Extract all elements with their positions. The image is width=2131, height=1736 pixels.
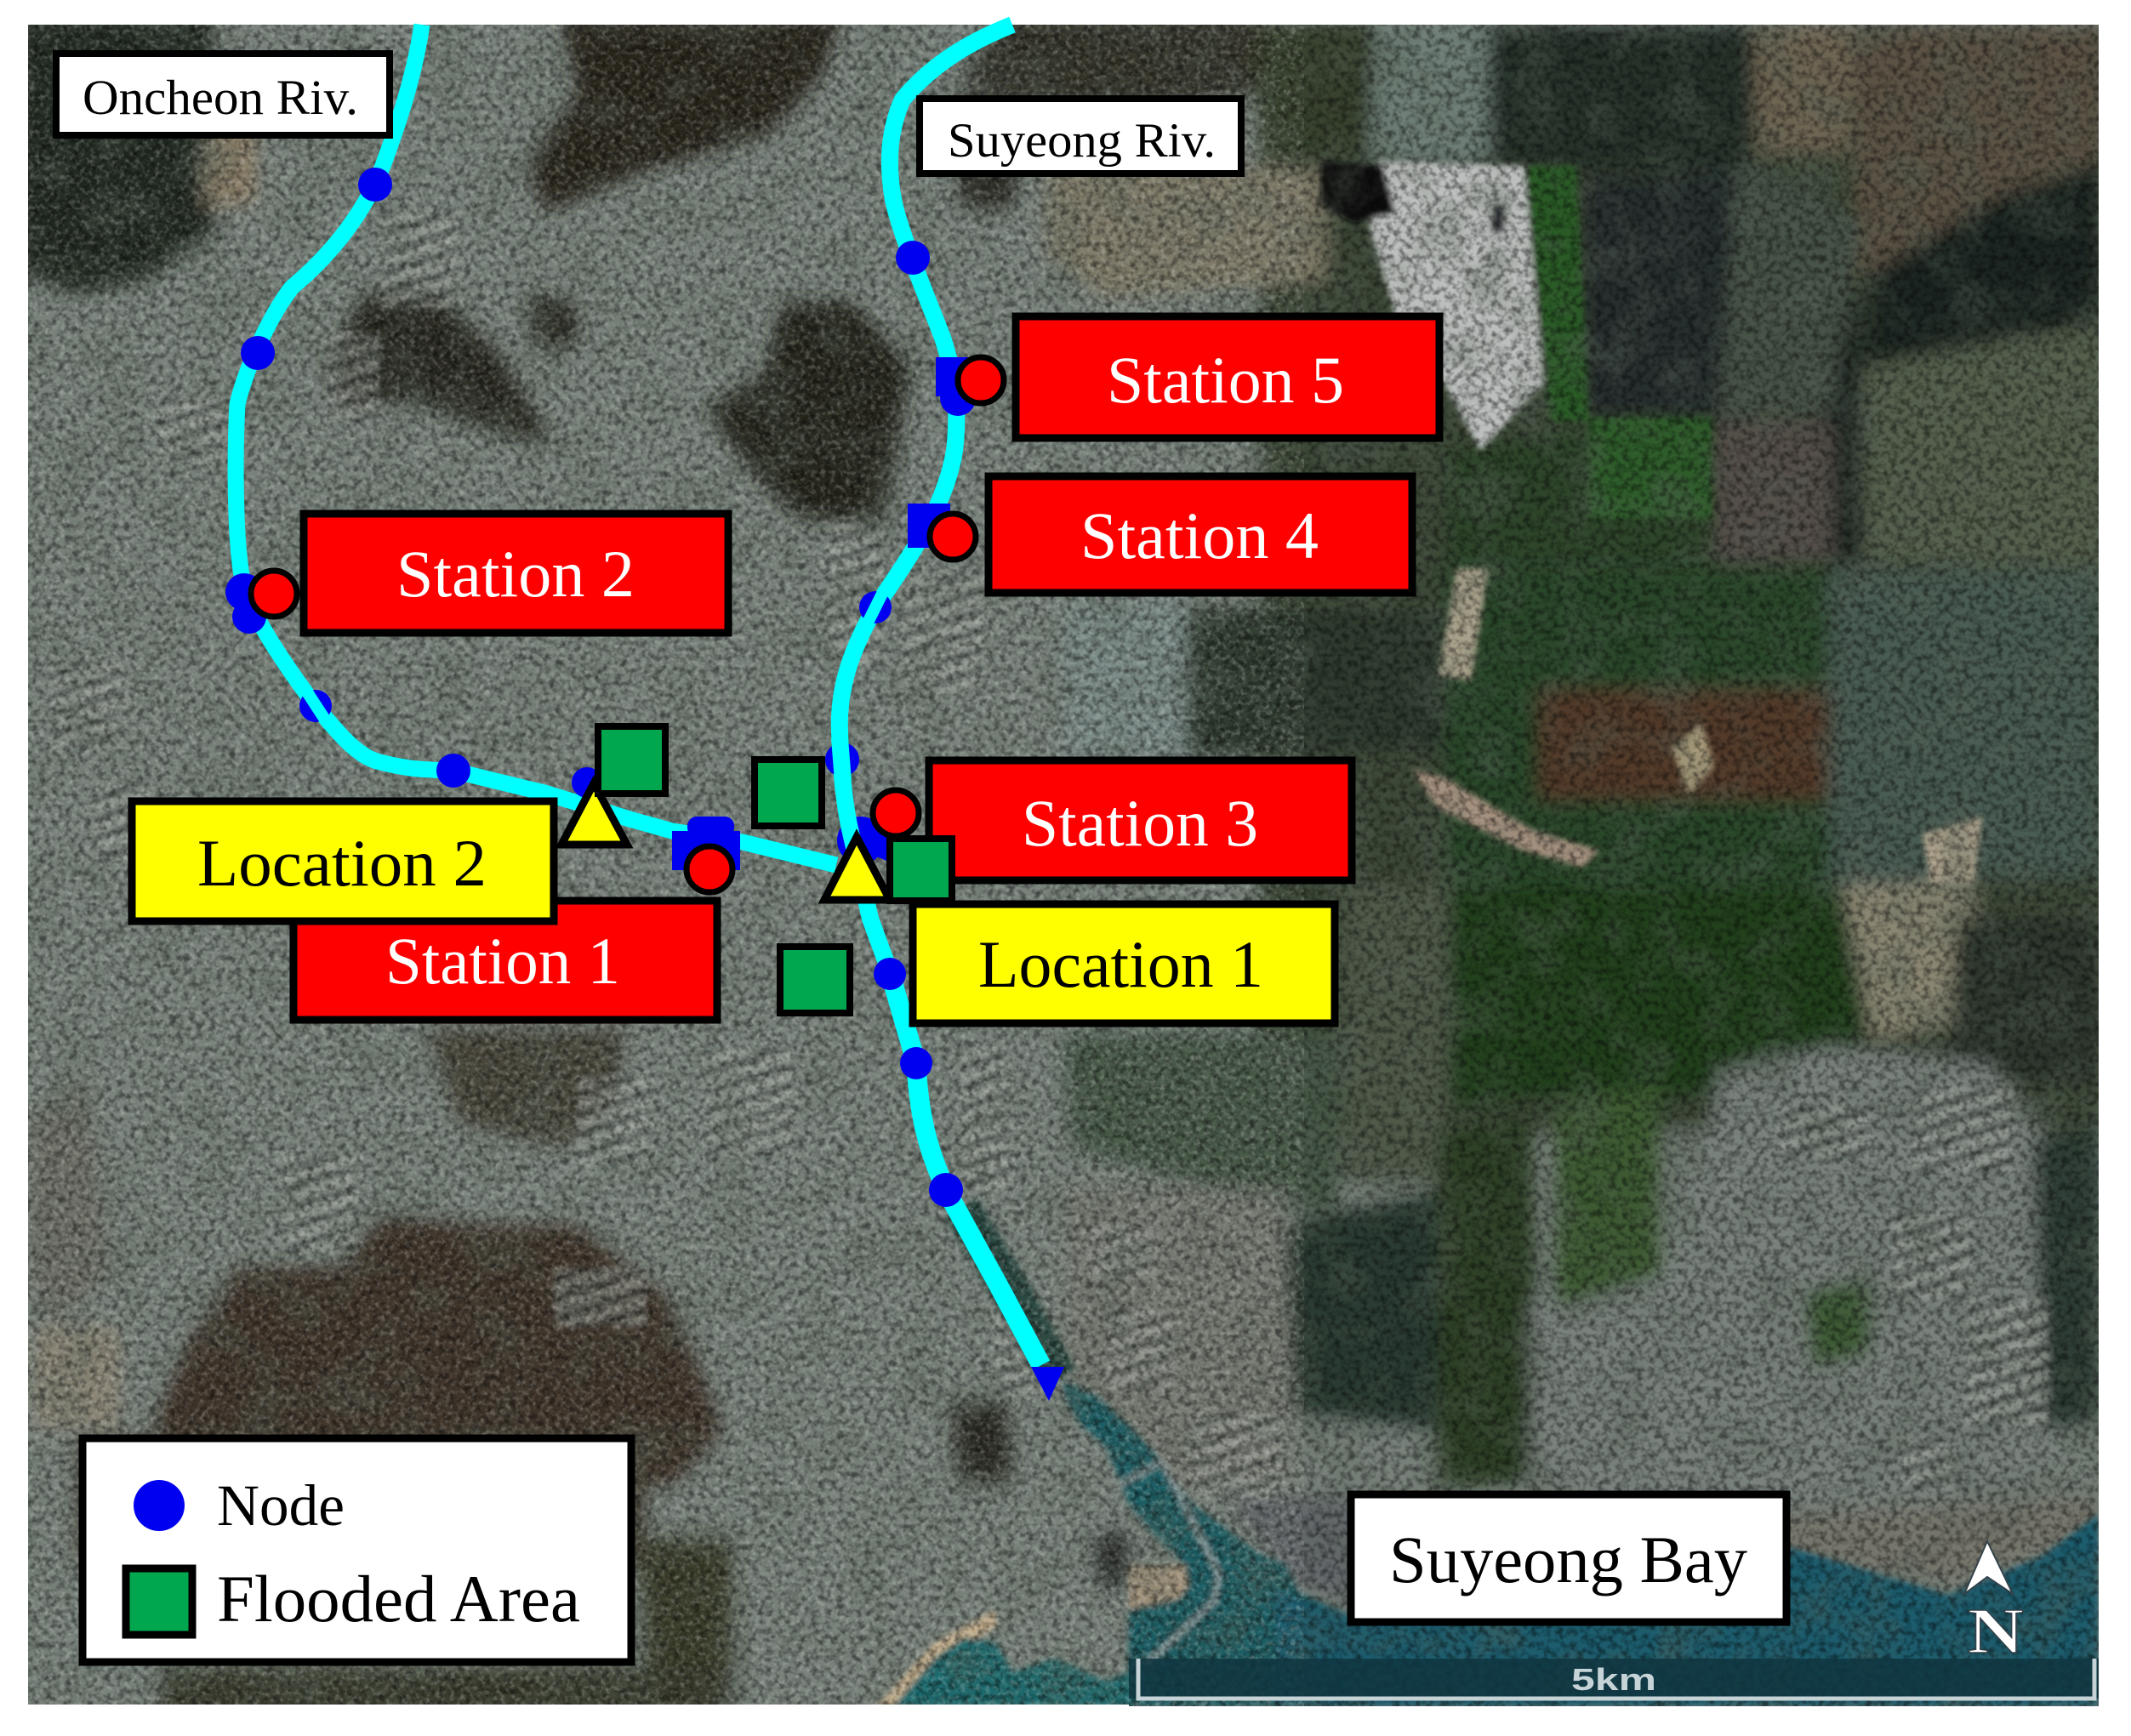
label: Suyeong Bay [1351, 1494, 1786, 1622]
label: Station 5: Station 5 [1107, 343, 1344, 417]
apartment blocks [51, 210, 2050, 1497]
south-east urban lobe [1063, 1182, 1293, 1497]
north central dark forest [527, 17, 842, 213]
label: Location 2 [132, 801, 554, 921]
cloud patch [1370, 161, 1544, 451]
legend [83, 1438, 631, 1662]
flooded area square D [780, 947, 850, 1013]
south-east sea [1276, 1514, 2099, 1706]
nodes under the river line [299, 589, 892, 781]
flooded area square C [890, 839, 952, 901]
label: Suyeong Riv. [920, 99, 1241, 174]
forest and patchwork centre [1446, 417, 1714, 561]
label: Location 1 [913, 904, 1335, 1023]
label: Station 3: Station 3 [1022, 786, 1258, 860]
flood location marker: Location 2 [561, 783, 627, 845]
nodes clustered behind station markers [225, 357, 978, 870]
pale scars [1412, 770, 1599, 868]
label: Station 4 [989, 476, 1412, 593]
nodes along the rivers [241, 168, 1064, 1401]
label: Oncheon Riv.: Oncheon Riv. [83, 70, 358, 125]
label: Suyeong Bay: Suyeong Bay [1389, 1523, 1747, 1597]
label: Suyeong Riv.: Suyeong Riv. [948, 114, 1216, 168]
label: Station 4: Station 4 [1080, 498, 1319, 572]
estuary [1063, 1380, 1353, 1706]
breakwater [1146, 1463, 1219, 1665]
legend icon: node [134, 1480, 185, 1531]
label: Station 1: Station 1 [385, 924, 620, 998]
bay west of seam with beach [1129, 1565, 1188, 1609]
river: Oncheon [236, 25, 836, 865]
river: Suyeong [840, 25, 1041, 1365]
north-east mountains [1752, 25, 1855, 153]
scale bar [1129, 1659, 2099, 1699]
upper river channel [961, 1208, 1059, 1378]
label: Oncheon Riv. [56, 54, 390, 135]
south-west mountains [425, 1029, 625, 1148]
flooded area square A [598, 726, 665, 794]
label: Station 3 [929, 760, 1352, 880]
station markers [251, 357, 1004, 892]
node behind river at Location 1 [837, 817, 885, 864]
north arrow: N [1968, 1596, 2024, 1667]
label: Station 2 [304, 514, 728, 633]
legend label: flooded area: Flooded Area [217, 1562, 580, 1636]
north-east valley strip [1046, 162, 1327, 298]
north-west dark forest [17, 17, 217, 293]
scale bar: 5km [1571, 1662, 1656, 1697]
green strip and block [1525, 166, 1589, 421]
label: Station 1 [293, 901, 717, 1020]
label: Location 1: Location 1 [978, 927, 1263, 1001]
label: Station 2: Station 2 [396, 537, 635, 611]
forest south of centre [1450, 885, 1880, 1106]
flood location marker: Location 1 [824, 837, 890, 900]
flooded area square B [755, 760, 822, 826]
legend label: node: Node [217, 1473, 345, 1538]
legend icon: flooded area [126, 1568, 192, 1635]
label: Location 2: Location 2 [197, 826, 487, 900]
north arrow [1964, 1541, 2024, 1667]
central hills [328, 289, 553, 442]
label: Station 5 [1016, 316, 1439, 438]
east half forest base [1259, 25, 2110, 1130]
